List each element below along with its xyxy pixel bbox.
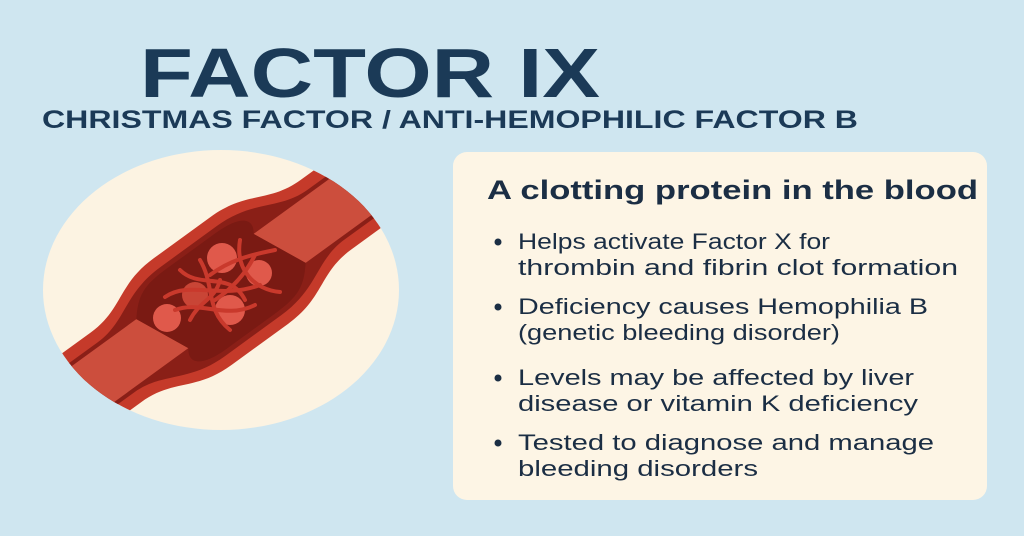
subtitle: CHRISTMAS FACTOR / ANTI-HEMOPHILIC FACTOR B <box>42 106 858 134</box>
bullet list: Levels may be affected by liver <box>518 365 914 390</box>
panel: description <box>453 152 987 500</box>
bullet list: bleeding disorders <box>518 456 758 481</box>
bullet list: thrombin and fibrin clot formation <box>518 255 958 280</box>
bullet list: Deficiency causes Hemophilia B <box>518 294 928 319</box>
bullet list: (genetic bleeding disorder) <box>518 320 840 345</box>
illustration: blood vessel with clot <box>43 150 399 430</box>
clot fibers and cells <box>153 240 280 332</box>
bullet list: Tested to diagnose and manage <box>518 430 934 455</box>
bullet list: Helps activate Factor X for <box>518 229 830 254</box>
title: FACTOR IX <box>140 34 600 112</box>
bullet list <box>494 229 958 481</box>
panel heading: A clotting protein in the blood <box>487 175 978 205</box>
bullet list: disease or vitamin K deficiency <box>518 391 918 416</box>
